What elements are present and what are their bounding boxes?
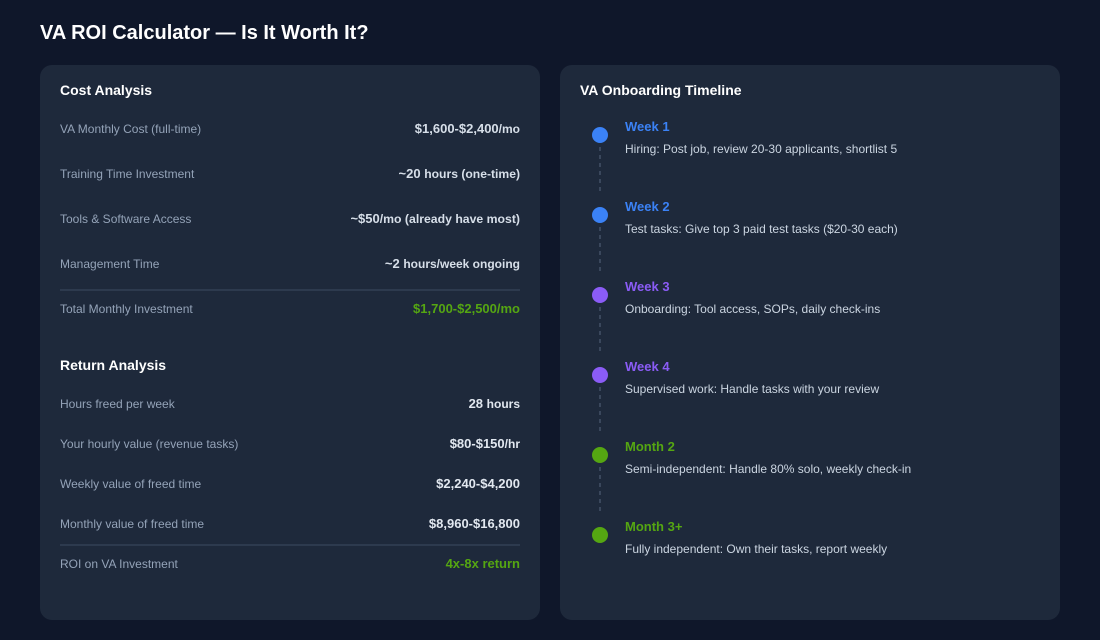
row: training time: [60, 166, 520, 181]
row: hours freed: 28 hours: [469, 396, 520, 411]
label: week 4: Week 4: [625, 359, 670, 374]
timeline item: month 3+: [592, 519, 888, 556]
row: hourly value: [60, 436, 520, 451]
heading: return analysis: Return Analysis: [60, 357, 166, 373]
heading: cost analysis: Cost Analysis: [60, 82, 152, 98]
title: VA ROI Calculator — Is It Worth It?: [40, 22, 369, 44]
marker: month 3+: [592, 527, 608, 543]
description: week 1: Hiring: Post job, review 20-30 applicants, shortlist 5: [625, 142, 897, 156]
description: week 2: Test tasks: Give top 3 paid test tasks ($20-30 each): [625, 222, 898, 236]
row: VA monthly cost: $1,600-$2,400/mo: [415, 121, 520, 136]
row: monthly value: [60, 516, 520, 531]
row: total monthly investment: Total Monthly Investment: [60, 302, 193, 316]
description: week 3: Onboarding: Tool access, SOPs, daily check-ins: [625, 302, 880, 316]
row: training time: Training Time Investment: [60, 167, 194, 181]
row: total monthly investment: [60, 301, 520, 316]
row: weekly value: [60, 476, 520, 491]
timeline item: week 3: [592, 279, 880, 351]
row: tools and software: [60, 211, 520, 226]
timeline item: week 4: [592, 359, 880, 431]
description: month 2: Semi-independent: Handle 80% solo, weekly check-in: [625, 462, 911, 476]
timeline item: week 1: [592, 119, 897, 191]
row: weekly value: $2,240-$4,200: [436, 476, 520, 491]
marker: month 2: [592, 447, 608, 463]
row: management time: ~2 hours/week ongoing: [385, 256, 520, 271]
row: management time: Management Time: [60, 257, 159, 271]
row: ROI: ROI on VA Investment: [60, 557, 178, 571]
marker: week 4: [592, 367, 608, 383]
label: month 3+: Month 3+: [625, 519, 682, 534]
label: week 2: Week 2: [625, 199, 670, 214]
row: ROI: [60, 556, 520, 571]
row: total monthly investment: $1,700-$2,500/mo: [413, 301, 520, 316]
row: monthly value: Monthly value of freed time: [60, 517, 204, 531]
row: tools and software: Tools & Software Access: [60, 212, 191, 226]
timeline item: month 2: [592, 439, 911, 511]
timeline item: week 2: [592, 199, 898, 271]
row: hourly value: Your hourly value (revenue tasks): [60, 437, 238, 451]
label: month 2: Month 2: [625, 439, 675, 454]
row: management time: [60, 256, 520, 271]
row: hourly value: $80-$150/hr: [450, 436, 520, 451]
row: training time: ~20 hours (one-time): [399, 166, 520, 181]
label: week 1: Week 1: [625, 119, 670, 134]
row: hours freed: Hours freed per week: [60, 397, 175, 411]
panel: onboarding timeline: [560, 65, 1060, 620]
row: VA monthly cost: [60, 121, 520, 136]
panel: cost and return analysis: [40, 65, 540, 620]
row: weekly value: Weekly value of freed time: [60, 477, 201, 491]
heading: timeline: VA Onboarding Timeline: [580, 82, 742, 98]
row: ROI: 4x-8x return: [446, 556, 520, 571]
row: hours freed: [60, 396, 520, 411]
marker: week 1: [592, 127, 608, 143]
row: monthly value: $8,960-$16,800: [429, 516, 520, 531]
marker: week 3: [592, 287, 608, 303]
description: month 3+: Fully independent: Own their tasks, report weekly: [625, 542, 887, 556]
row: VA monthly cost: VA Monthly Cost (full-time): [60, 122, 201, 136]
label: week 3: Week 3: [625, 279, 670, 294]
row: tools and software: ~$50/mo (already have most): [350, 211, 520, 226]
description: week 4: Supervised work: Handle tasks with your review: [625, 382, 879, 396]
marker: week 2: [592, 207, 608, 223]
